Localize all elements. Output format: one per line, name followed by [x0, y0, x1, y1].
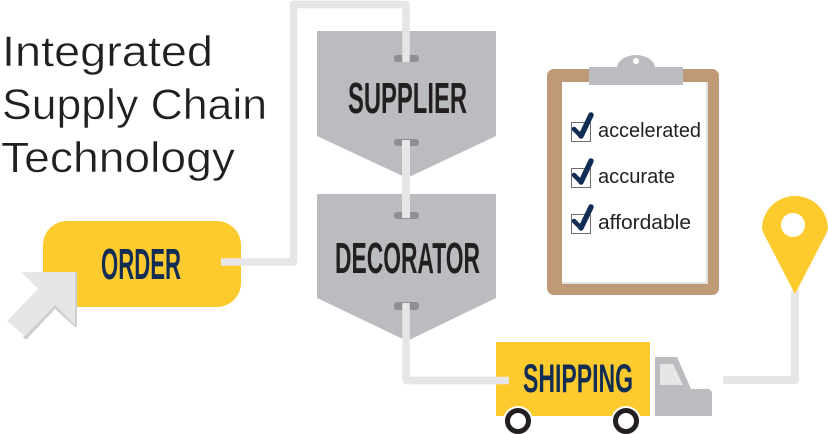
panel: clipboard: [547, 55, 719, 295]
panel: decorator: DECORATOR: [335, 234, 480, 283]
connector: order to supplier: [221, 4, 406, 262]
panel: order: [43, 221, 241, 307]
checklist item: affordable: [572, 207, 691, 234]
panel: shipping truck: SHIPPING: [523, 357, 633, 401]
icon: clipboard clip: [589, 55, 683, 85]
panel: supplier: SUPPLIER: [348, 74, 467, 123]
title: Integrated: [2, 28, 213, 76]
panel: order: ORDER: [101, 240, 181, 289]
connector: supplier to decorator: [402, 140, 410, 218]
panel: shipping truck: [496, 342, 712, 434]
connector: decorator to shipping: [406, 303, 509, 380]
icon: map pin: [762, 196, 828, 294]
checklist item: affordable: affordable: [598, 212, 691, 234]
connector: truck to pin: [723, 290, 795, 380]
checklist item: accelerated: [572, 115, 701, 142]
icon: cursor arrow: [7, 272, 77, 339]
checklist item: accurate: accurate: [598, 166, 675, 188]
checklist item: accelerated: accelerated: [598, 120, 701, 142]
title: Supply Chain: [2, 81, 267, 129]
panel: decorator: [317, 194, 496, 341]
title: Technology: [1, 134, 236, 182]
title: [1, 28, 267, 182]
checklist item: accurate: [572, 161, 675, 188]
panel: supplier: [317, 31, 496, 178]
